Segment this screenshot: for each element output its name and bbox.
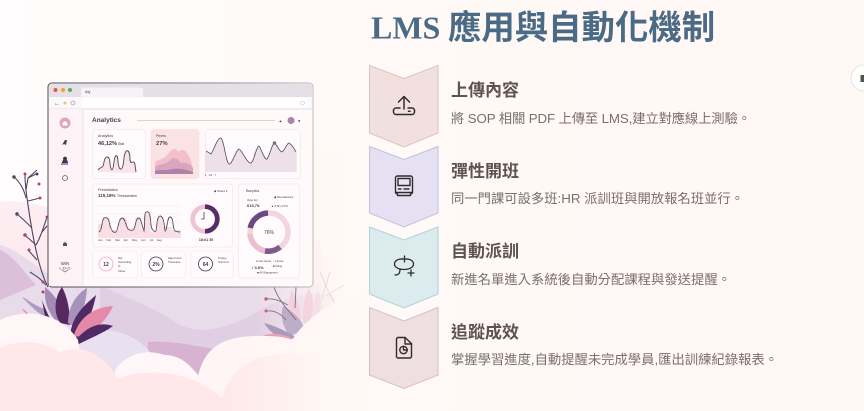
card: analytics donut: ▪ 3.6% (252, 265, 264, 270)
card: analytics donut: 615,75. (247, 203, 260, 208)
illustration: front clouds (0, 288, 372, 411)
stat cards row: Hign Fome (168, 256, 182, 260)
card: analytics donut: Opte fun (247, 198, 258, 202)
card: analytics line chart (92, 130, 146, 178)
description: 同一門課可設多班:HR 派訓班與開放報名班並行。 (451, 191, 744, 206)
card: analytics donut: ■ Filing (273, 264, 283, 268)
header: Analytics: ▾ (298, 118, 301, 124)
right fade of hills (255, 150, 345, 411)
step 3: auto assign (370, 227, 731, 308)
stat cards row: In (118, 264, 121, 268)
heading: 彈性開班 (451, 162, 519, 181)
card: analytics donut: Barylics (246, 189, 259, 193)
card: area chart 27%: 27% (156, 141, 168, 147)
card: analytics line chart: Analytics (98, 134, 113, 138)
icon: document with chart (396, 338, 412, 358)
stat cards row: 12 (103, 262, 109, 268)
description: 將 SOP 相關 PDF 上傳至 LMS,建立對應線上測驗。 (451, 110, 751, 126)
sidebar: WiN (61, 261, 69, 266)
icon: computer (396, 176, 412, 196)
card: prediction bar line chart: Timesstrates (117, 194, 137, 198)
card: analytics donut: ● Net Gener (256, 259, 271, 263)
browser title bar: Aly (85, 89, 91, 94)
icon: right plant leaves and branch (258, 272, 344, 340)
stat cards row: 2% (152, 262, 160, 268)
heading: 自動派訓 (451, 241, 519, 261)
card: analytics donut (238, 184, 300, 278)
donut chart with clock: 18:01 35 (199, 238, 213, 242)
browser title bar: ← (54, 101, 60, 107)
description: 新進名單進入系統後自動分配課程與發送提醒。 (451, 272, 731, 287)
card: analytics line chart: Stat (118, 142, 124, 146)
step 2: flexible classes (370, 146, 744, 227)
stat cards row: Close (118, 269, 126, 273)
icon: loop with plus (394, 256, 414, 276)
dashboard browser window (48, 83, 313, 287)
card: analytics donut: ○ Hense (273, 259, 284, 263)
card: prediction bar line chart: 115,18% (98, 193, 116, 198)
chevron 1 (370, 66, 438, 147)
card: spike line chart: 1 10 7 (205, 173, 216, 177)
stat cards row (92, 251, 233, 278)
card: spike line chart (205, 130, 300, 178)
icon: upload (394, 96, 414, 114)
sidebar (49, 109, 83, 286)
card: prediction bar line chart: Jan Feb Mar Apr May Jun Jul Aug (98, 238, 162, 242)
stat cards row: Thevestor (168, 260, 181, 264)
card: analytics line chart: 46,12% (98, 141, 117, 147)
step 4: track results (370, 308, 778, 388)
card: prediction bar line chart: ◆ Share ▾ (214, 189, 228, 193)
card: analytics donut: ▲ 5.5/1.1/7% (271, 204, 288, 208)
stat cards row: Net (118, 256, 123, 260)
header: Analytics: Analytics (92, 117, 121, 124)
stat cards row: Summiting (118, 260, 132, 264)
sidebar: L·D·O (60, 266, 70, 270)
title: 應用與自動化機制 (448, 10, 715, 47)
floating round button (851, 65, 864, 91)
header: Analytics (92, 117, 301, 124)
card: area chart 27%: Peers (156, 134, 166, 138)
illustration: hills background (0, 201, 350, 411)
card: prediction bar line chart: Presidiation (98, 188, 118, 192)
donut chart with clock (193, 207, 217, 242)
card: area chart 27% (151, 130, 199, 178)
chevron 2 (370, 146, 438, 227)
card: analytics donut: ◆ Attendarance (274, 195, 294, 199)
heading: 上傳內容 (451, 80, 519, 100)
icon: left branch with berries (12, 170, 48, 294)
step 1: upload content (370, 66, 751, 147)
stat cards row: Turkey (218, 256, 227, 260)
card: analytics donut: ■ All Shangment (257, 270, 278, 274)
card: analytics donut: 76% (264, 230, 275, 236)
heading: 追蹤成效 (451, 322, 519, 342)
chevron 4 (370, 308, 438, 388)
title: LMS (371, 10, 440, 46)
header: Analytics: ◂ (279, 118, 282, 124)
stat cards row: 64 (203, 262, 208, 268)
stat cards row: Summon (218, 260, 230, 264)
chevron 3 (370, 227, 438, 308)
card: prediction bar line chart (92, 184, 232, 247)
icon: purple plant leaves (22, 287, 113, 345)
browser title bar (49, 84, 312, 109)
description: 掌握學習進度,自動提醒未完成學員,匯出訓練紀錄報表。 (451, 352, 778, 367)
